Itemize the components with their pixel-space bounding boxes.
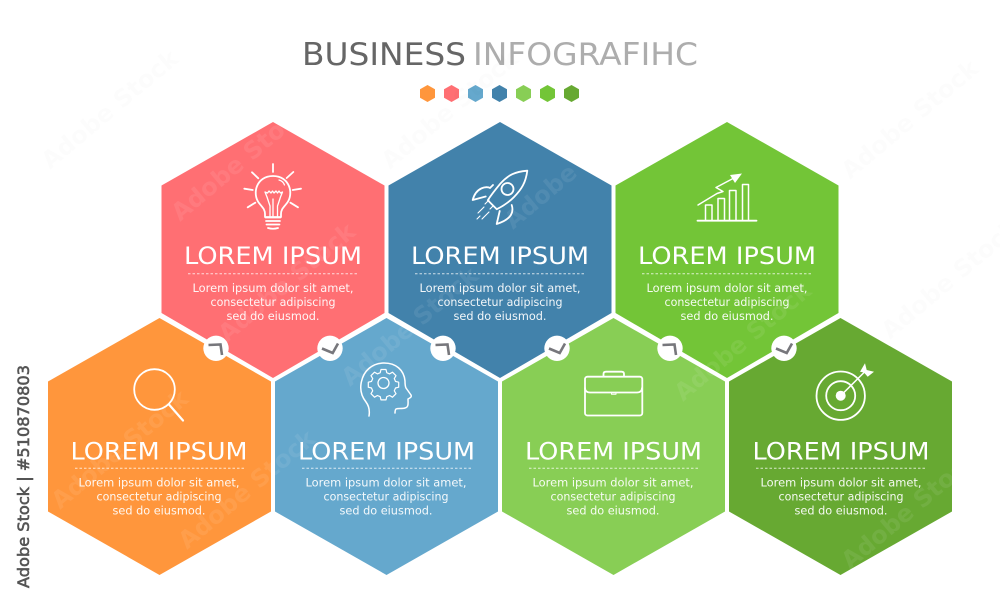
body text: consectetur adipiscing (438, 295, 562, 309)
faint diagonal watermarks: Adobe Stock (499, 104, 647, 235)
heading: LOREM IPSUM (752, 438, 930, 466)
body text: Lorem ipsum dolor sit amet, (532, 476, 694, 490)
panel: light green briefcase hexagon (502, 318, 725, 575)
body text: sed do eiusmod. (680, 309, 774, 323)
body text (306, 476, 466, 518)
icon: briefcase (585, 372, 642, 416)
panel: red idea hexagon (162, 122, 384, 378)
panel: green growth hexagon (616, 122, 838, 378)
connector badges with chevrons (203, 336, 797, 361)
body text: sed do eiusmod. (454, 309, 546, 323)
body text (760, 476, 922, 518)
icon: light bulb (244, 164, 301, 229)
dashed rule (415, 273, 585, 275)
dashed rule (188, 273, 358, 275)
stock watermark id, rotated: Adobe Stock | #510870803 (14, 365, 33, 588)
panel: light blue thinking hexagon (275, 318, 498, 575)
body text: Lorem ipsum dolor sit amet, (78, 476, 240, 490)
panel: orange search hexagon (48, 318, 271, 575)
body text: consectetur adipiscing (324, 490, 448, 504)
body text (420, 281, 580, 323)
heading: LOREM IPSUM (70, 438, 248, 466)
title word: infografihc: INFOGRAFIHC (473, 37, 698, 73)
body text: sed do eiusmod. (112, 504, 206, 518)
dashed rule (756, 467, 925, 469)
body text: sed do eiusmod. (226, 309, 320, 323)
hexagon shape (275, 318, 498, 575)
title word: business: BUSINESS (302, 37, 466, 73)
hexagon shape (162, 122, 384, 378)
body text: consectetur adipiscing (550, 490, 676, 504)
hexagon shape (502, 318, 725, 575)
heading: LOREM IPSUM (411, 242, 589, 270)
faint diagonal watermarks: Adobe Stock (336, 261, 484, 392)
hexagon shape (729, 318, 952, 575)
hexagon shape (616, 122, 838, 378)
colour key: small hexagons (420, 85, 579, 102)
heading: LOREM IPSUM (298, 438, 475, 466)
body text: consectetur adipiscing (664, 295, 790, 309)
faint diagonal watermarks: Adobe Stock (669, 276, 817, 407)
body text: consectetur adipiscing (96, 490, 222, 504)
icon: head with gear (361, 363, 411, 416)
panel: dark green target hexagon (729, 318, 952, 575)
body text (646, 281, 808, 323)
faint diagonal watermarks: Adobe Stock (836, 54, 984, 185)
hexagon shape (388, 122, 612, 378)
icon: magnifier (134, 369, 183, 420)
dashed rule (529, 467, 698, 469)
faint diagonal watermarks: Adobe Stock (36, 44, 184, 175)
dashed rule (642, 273, 812, 275)
dashed rule (302, 467, 471, 469)
icon: rocket (473, 171, 527, 224)
body text: Lorem ipsum dolor sit amet, (420, 281, 580, 295)
body text (532, 476, 694, 518)
body text (192, 281, 354, 323)
body text: sed do eiusmod. (566, 504, 660, 518)
faint diagonal watermarks: Adobe Stock (46, 384, 194, 515)
dashed rule (75, 467, 244, 469)
body text: Lorem ipsum dolor sit amet, (646, 281, 808, 295)
body text: consectetur adipiscing (778, 490, 904, 504)
faint diagonal watermarks: Adobe Stock (213, 217, 361, 348)
body text: sed do eiusmod. (794, 504, 888, 518)
heading: LOREM IPSUM (184, 242, 362, 270)
heading: LOREM IPSUM (638, 242, 816, 270)
icon: growth chart (698, 174, 756, 221)
icon: target (816, 363, 874, 420)
title (302, 37, 698, 73)
body text: Lorem ipsum dolor sit amet, (306, 476, 466, 490)
body text: consectetur adipiscing (210, 295, 336, 309)
body text: Lorem ipsum dolor sit amet, (192, 281, 354, 295)
faint diagonal watermarks: Adobe Stock (173, 424, 321, 555)
faint diagonal watermarks: Adobe Stock (166, 96, 314, 227)
body text (78, 476, 240, 518)
faint diagonal watermarks: Adobe Stock (836, 444, 984, 575)
heading: LOREM IPSUM (525, 438, 702, 466)
hexagon shape (48, 318, 271, 575)
panel: deep blue rocket hexagon (388, 122, 612, 378)
body text: Lorem ipsum dolor sit amet, (760, 476, 922, 490)
body text: sed do eiusmod. (340, 504, 432, 518)
faint diagonal watermarks: Adobe Stock (376, 44, 524, 175)
